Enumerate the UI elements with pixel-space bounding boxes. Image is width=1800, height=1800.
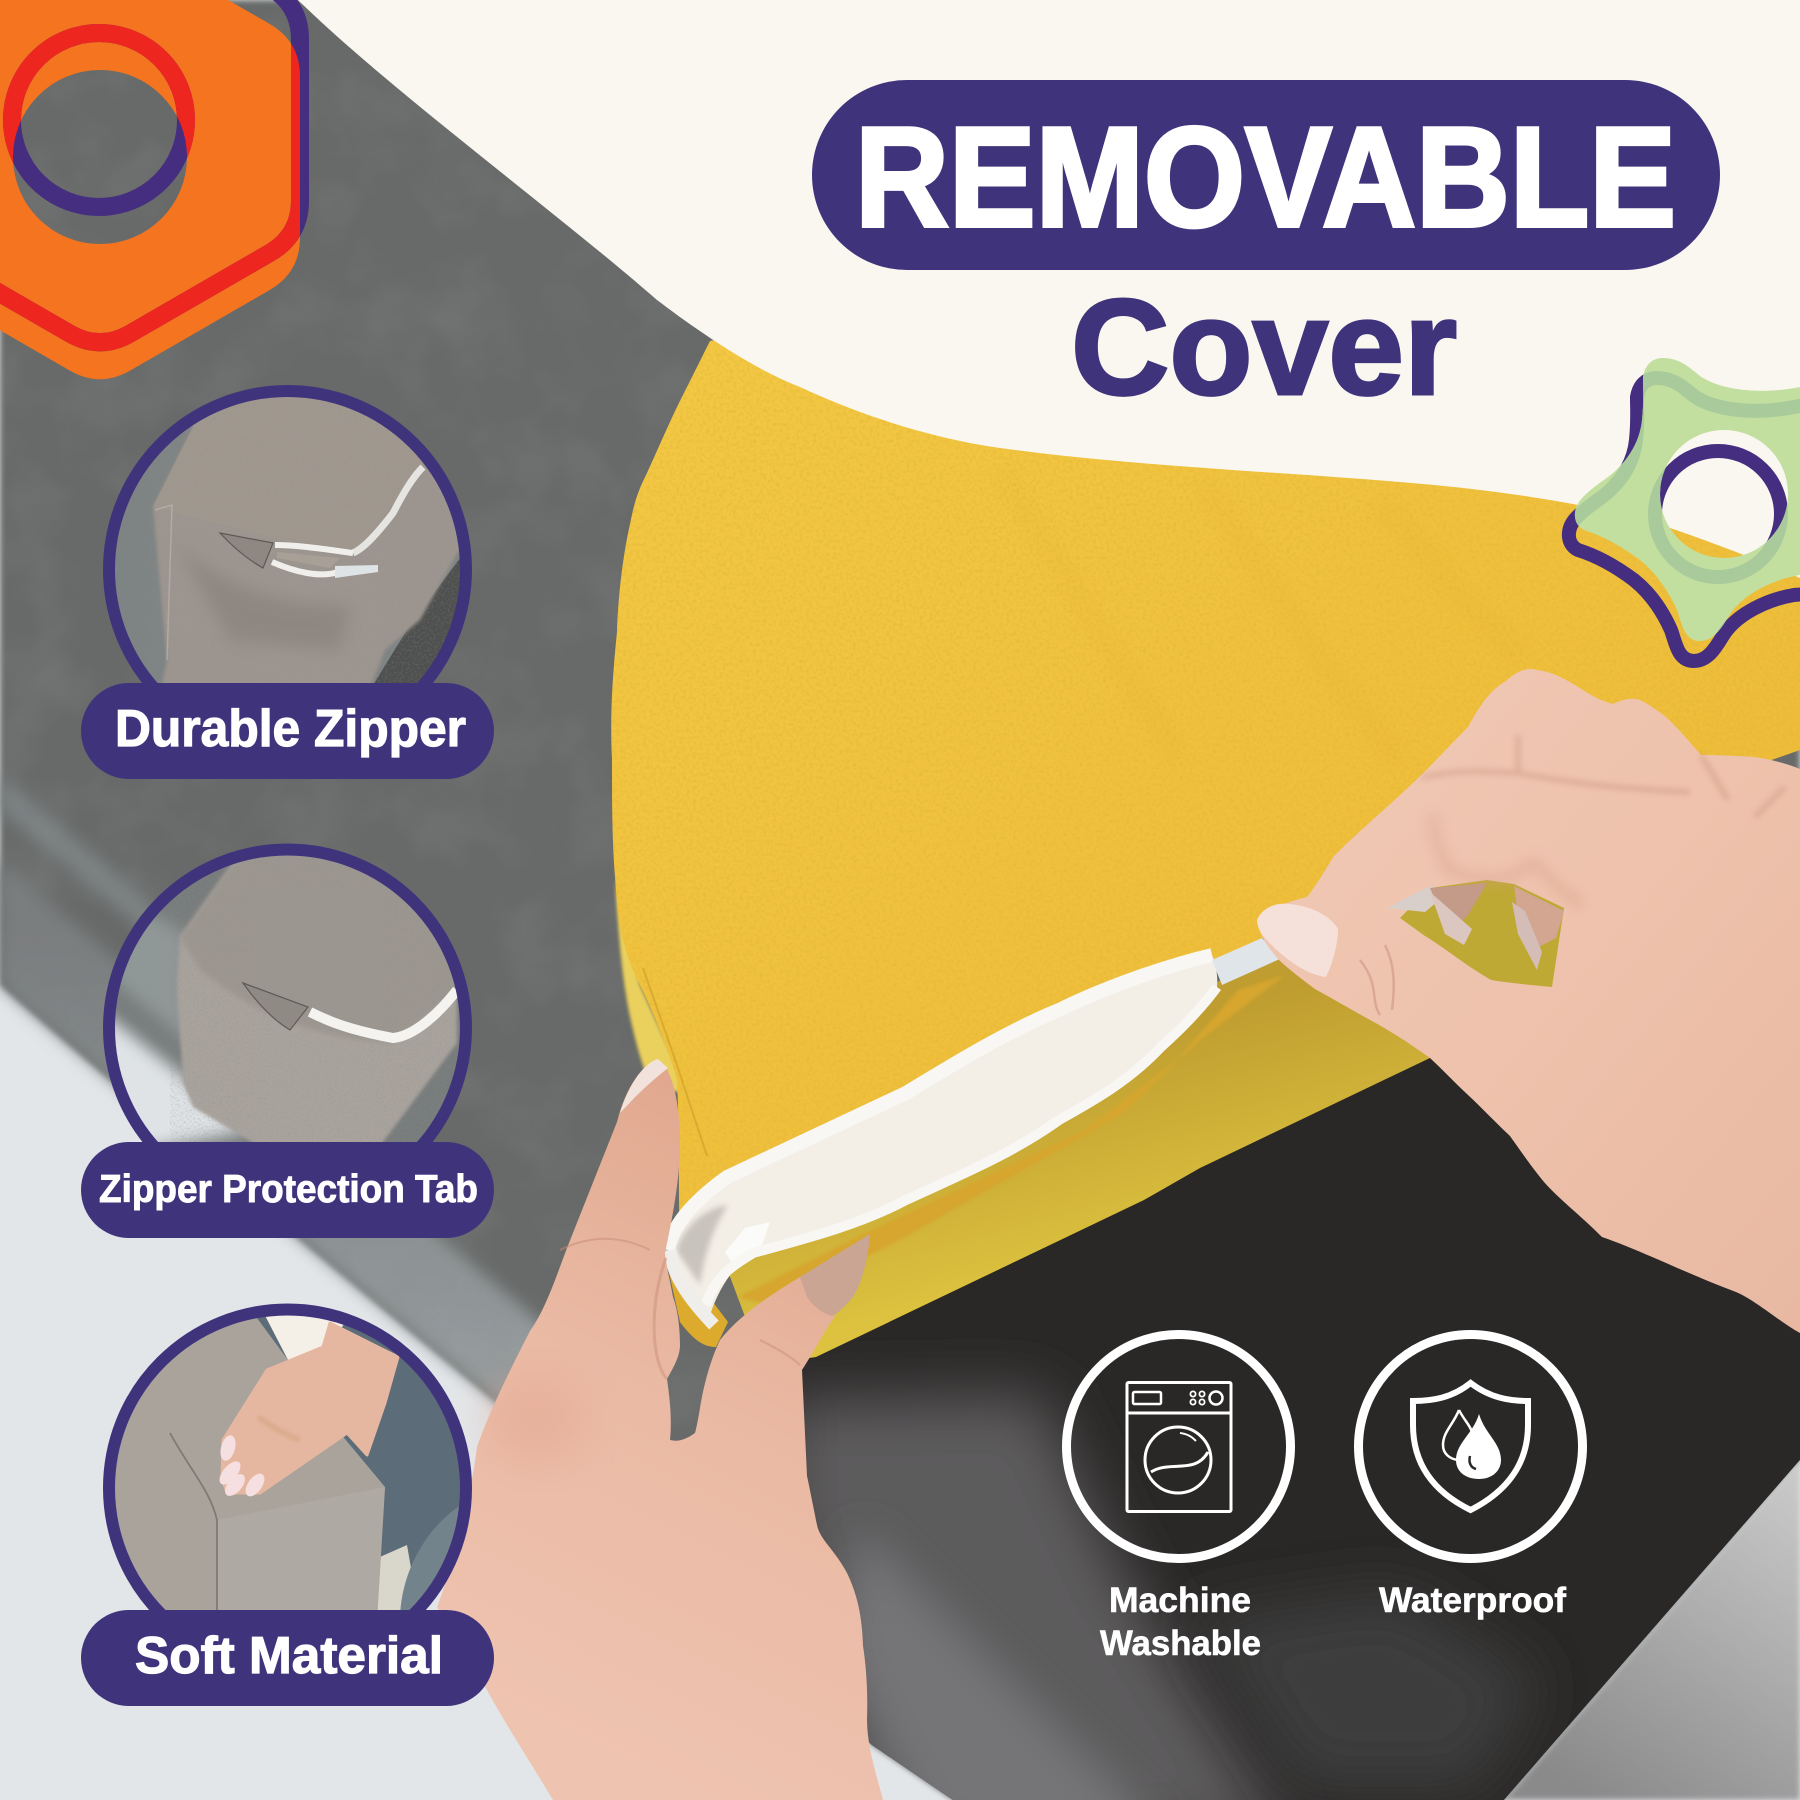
inset: soft material: Soft Material xyxy=(135,1627,443,1685)
label: Waterproof: Waterproof xyxy=(1379,1581,1566,1620)
cream top wave xyxy=(298,0,1800,578)
inset: durable zipper xyxy=(81,380,494,779)
left hand holding cushion xyxy=(437,1059,883,1800)
label: Machine Washable: Machine xyxy=(1109,1581,1251,1620)
title: REMOVABLE pill: REMOVABLE xyxy=(855,98,1676,257)
label: Machine Washable xyxy=(1100,1581,1261,1663)
thumbnail right hand xyxy=(1257,904,1338,977)
icon: washing machine in circle xyxy=(1066,1334,1290,1558)
thumbnail left hand xyxy=(800,1234,870,1316)
yellow cushion top xyxy=(600,300,1800,1250)
open zipper xyxy=(668,938,1282,1325)
decorative green star xyxy=(1569,358,1800,661)
decorative orange hexagon xyxy=(0,0,300,379)
label: Machine Washable: Washable xyxy=(1100,1624,1261,1663)
title: Cover: Cover xyxy=(1071,271,1457,423)
background photo: dark sofa seat xyxy=(780,1040,1800,1800)
fingernail left hand xyxy=(620,1059,668,1113)
inset: zipper protection tab xyxy=(81,840,494,1238)
right hand pulling zipper xyxy=(1257,669,1800,1333)
icon: water shield in circle xyxy=(1358,1334,1582,1558)
background photo: floor at lower right xyxy=(1504,1460,1800,1800)
inset: durable zipper: Durable Zipper xyxy=(115,700,466,758)
inset: zipper protection tab: Zipper Protection Tab xyxy=(99,1168,478,1211)
inset: soft material xyxy=(81,1300,494,1706)
yellow cushion side xyxy=(615,870,1560,1358)
